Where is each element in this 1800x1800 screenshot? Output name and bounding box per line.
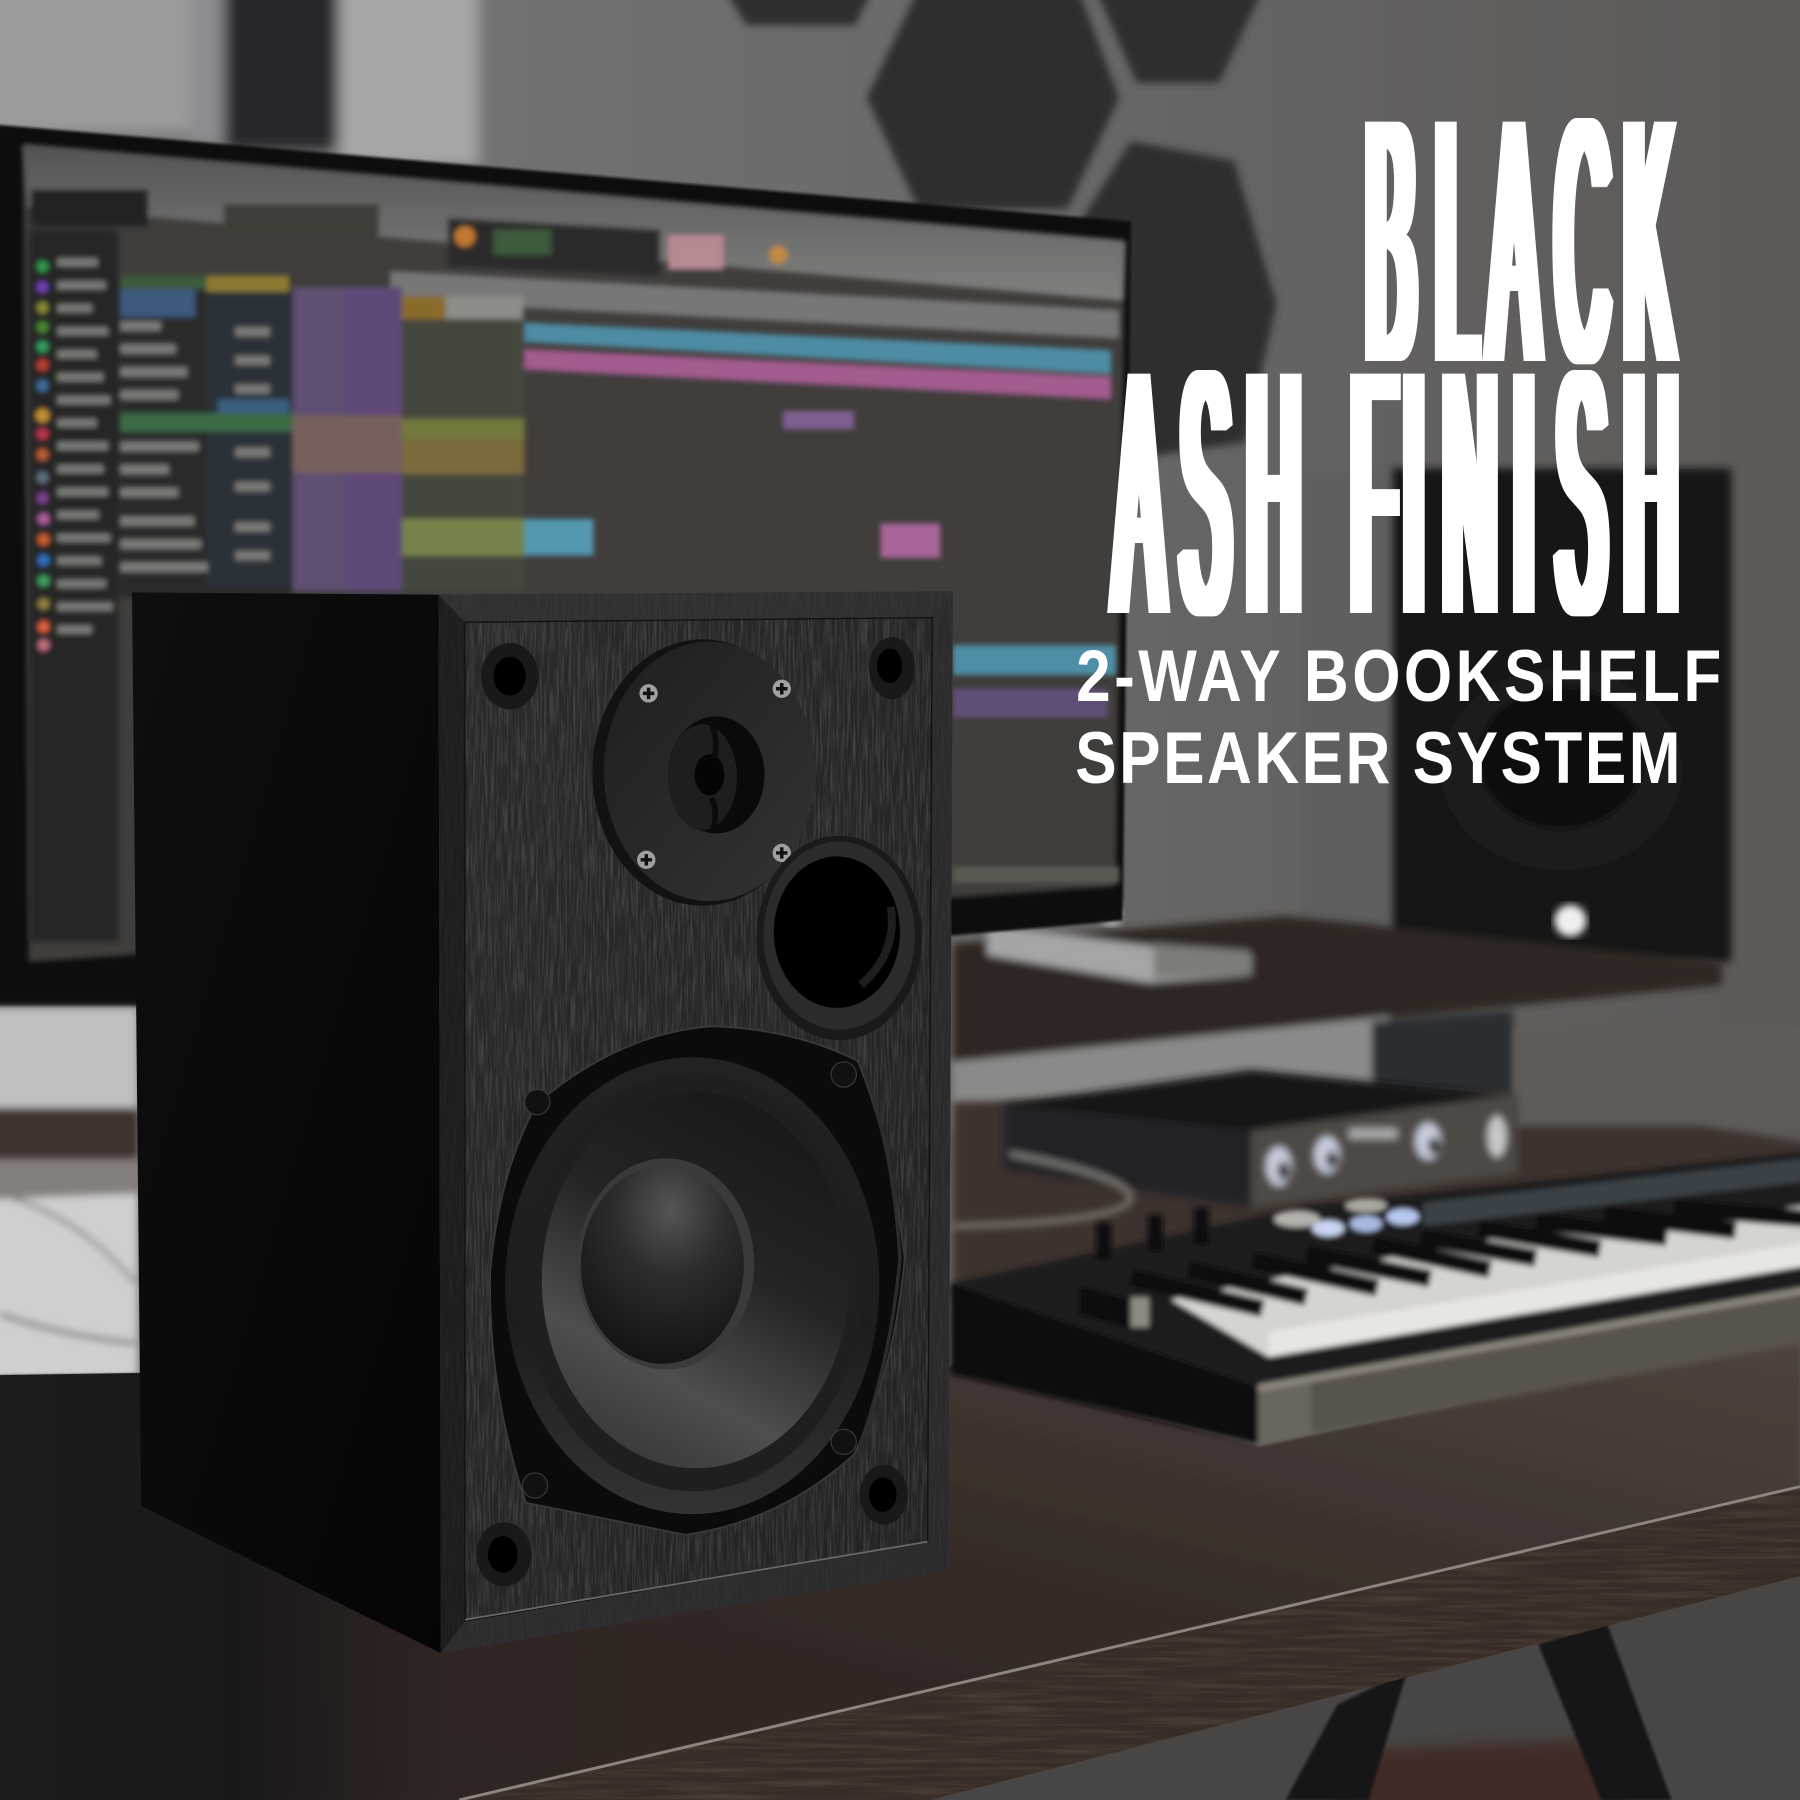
mounting holes bbox=[476, 637, 915, 1586]
subtitle: 2-way bookshelf speaker system: SPEAKER SYSTEM bbox=[1075, 718, 1680, 799]
rear desk and paper on the left bbox=[0, 1008, 138, 1383]
daw interface on screen bbox=[23, 145, 1125, 941]
desk front edge bbox=[459, 1481, 1800, 1800]
track name lists bbox=[57, 258, 270, 634]
shelf indicator lights bbox=[1100, 902, 1586, 937]
woofer bbox=[490, 1026, 905, 1535]
main desk top bbox=[0, 1332, 1800, 1800]
midi keyboard bbox=[951, 1148, 1800, 1444]
keyboard controls bbox=[1079, 1155, 1800, 1329]
track colour dots bbox=[36, 261, 49, 651]
acoustic hexagon panels bbox=[717, 0, 1277, 459]
title: black ash finish bbox=[1114, 47, 1677, 688]
back table behind keyboard bbox=[953, 1027, 1800, 1297]
black keys bbox=[1131, 1208, 1800, 1309]
cabinet front baffle bbox=[436, 585, 955, 1659]
cabinet side panel bbox=[132, 592, 441, 1653]
tweeter bbox=[592, 639, 815, 906]
subtitle: 2-way bookshelf speaker system bbox=[1075, 636, 1721, 799]
title: black ash finish: BLACK bbox=[1366, 47, 1673, 436]
keyboard body bbox=[951, 1148, 1800, 1444]
rear studio monitor speaker bbox=[1303, 468, 1731, 962]
audio interface bbox=[953, 1070, 1518, 1226]
wall and legs below desk bbox=[895, 1561, 1800, 1800]
upper shelf bbox=[953, 916, 1722, 1131]
bass port bbox=[757, 836, 922, 1040]
white keys bbox=[1171, 1203, 1800, 1357]
subtitle: 2-way bookshelf speaker system: 2-WAY BOOKSHELF bbox=[1076, 636, 1721, 717]
foreground bookshelf speaker bbox=[132, 585, 955, 1659]
title: black ash finish: ASH FINISH bbox=[1114, 299, 1677, 688]
computer monitor bbox=[0, 124, 1131, 1007]
